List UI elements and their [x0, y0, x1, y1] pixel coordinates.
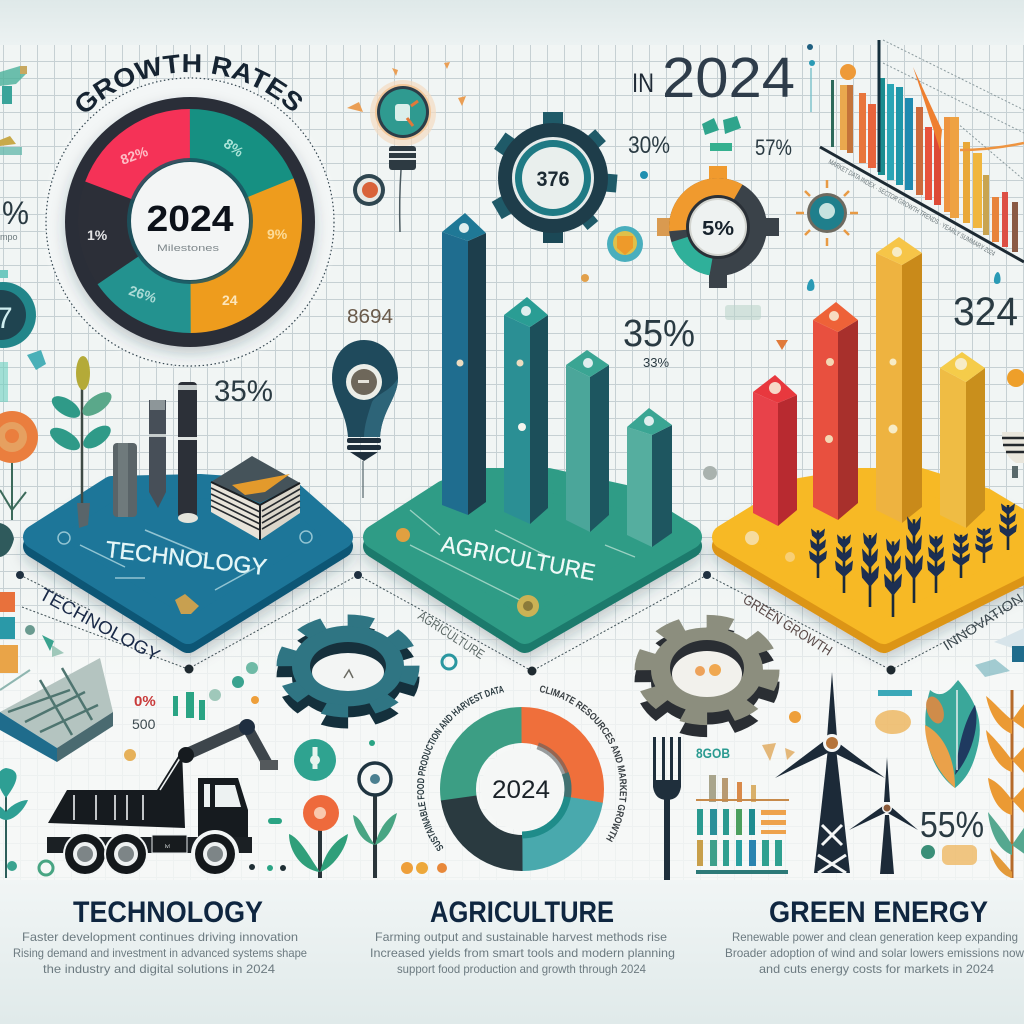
bar gold — [940, 352, 985, 528]
icon: colorful leaf — [875, 680, 980, 865]
small icons and scraps: technology: 500 — [132, 716, 156, 732]
left scraps: mpo — [0, 232, 18, 242]
small icons and scraps: technology — [124, 655, 456, 874]
percent labels: 8694 — [347, 306, 393, 328]
donut year: 2024 — [492, 776, 550, 804]
percent labels: 55% — [920, 804, 984, 845]
percent labels — [2, 132, 1018, 845]
percent labels: 35% — [623, 313, 695, 355]
description: Farming output and sustainable harvest methods rise — [375, 930, 667, 944]
bar red — [753, 375, 797, 526]
footer: technology — [13, 896, 307, 976]
footer: green energy — [725, 896, 1024, 976]
description: Faster development continues driving innovation — [22, 930, 298, 944]
bar yellow — [876, 237, 922, 523]
panel label: TECHNOLOGY — [104, 536, 268, 580]
icon: dump truck with crane — [47, 719, 278, 878]
segment labels: 9% — [267, 226, 288, 242]
year heading: in 2024: IN — [632, 68, 654, 98]
side label: green energy left: GREEN GROWTH — [740, 591, 835, 659]
icon: large wind turbine — [775, 672, 885, 873]
panel label: AGRICULTURE — [439, 531, 597, 585]
segment labels — [87, 135, 288, 308]
left scraps — [0, 66, 46, 402]
footer: agriculture — [370, 896, 675, 976]
connectors with nodes — [16, 571, 1024, 676]
panel: technology platform — [35, 486, 341, 641]
panel icons — [745, 531, 795, 562]
heading: TECHNOLOGY — [73, 896, 263, 929]
segment labels: 8% — [221, 135, 247, 160]
panel icons — [58, 530, 312, 590]
donut chart: 2024 growth rates — [40, 72, 340, 372]
segment labels: 82% — [118, 143, 150, 168]
panel icons — [410, 510, 635, 600]
segment labels: 1% — [87, 227, 108, 243]
icon: orange flower — [289, 795, 348, 878]
icon: gear with 376 — [492, 112, 618, 243]
icon: large lightbulb — [332, 340, 398, 498]
bar 4 — [627, 408, 672, 547]
segment labels: 24 — [222, 292, 238, 308]
chart: small factory bars — [696, 711, 801, 874]
icon: teal gear — [285, 621, 411, 722]
description: Increased yields from smart tools and modern planning — [370, 946, 675, 960]
center caption: Milestones — [157, 243, 220, 253]
side label: green energy right: INNOVATION — [940, 590, 1024, 654]
bar 2 — [504, 297, 548, 524]
icon: orange wheat — [986, 690, 1024, 878]
description — [725, 930, 1024, 976]
icon: sun — [796, 180, 858, 246]
side label: technology: TECHNOLOGY — [36, 584, 163, 665]
icon: gear with percent: 5% — [702, 218, 734, 240]
icon: gray gear — [643, 621, 771, 731]
icon: teal badge — [294, 739, 336, 781]
description: Rising demand and investment in advanced systems shape — [13, 946, 307, 960]
description — [370, 930, 675, 976]
icon: small orange dial — [353, 174, 385, 206]
percent labels: 33% — [643, 355, 669, 370]
description: Broader adoption of wind and solar lowers emissions now — [725, 946, 1024, 960]
wheels — [63, 830, 239, 878]
bar 1 — [442, 213, 486, 515]
bar orange red — [813, 302, 858, 520]
percent labels: 30% — [628, 132, 670, 159]
icon: small wind turbine — [849, 757, 918, 874]
icon: crop seedlings — [809, 503, 1017, 617]
icon: gear with percent — [657, 166, 779, 288]
panel: agriculture platform — [375, 480, 690, 641]
heading: GREEN ENERGY — [769, 896, 988, 929]
icon: left mini panels — [0, 592, 64, 690]
ring text right: CLIMATE RESOURCES AND MARKET GROWTH — [540, 686, 627, 842]
icon: ring flower — [353, 763, 397, 878]
icon: bottom left plant — [0, 768, 53, 878]
description — [13, 930, 307, 976]
panel: green energy platform — [724, 480, 1024, 641]
description: Renewable power and clean generation keep expanding — [732, 930, 1018, 944]
icon: dump truck with crane: lvl — [165, 844, 170, 850]
ring text left: SUSTAINABLE FOOD PRODUCTION AND HARVEST DATA — [417, 686, 504, 851]
small scattered dots and scraps: upper middle — [581, 44, 1001, 480]
bar chart: green energy bars — [753, 237, 985, 528]
icon: chip box — [0, 658, 113, 762]
chart: top right declining bars — [820, 40, 1024, 262]
side label: agriculture: AGRICULTURE — [415, 608, 487, 662]
small icons and scraps: technology: 0% — [134, 693, 156, 710]
icon: plant left — [46, 356, 115, 528]
icon: right mini panel — [975, 628, 1024, 677]
percent labels: % — [2, 195, 29, 231]
icon: top lightbulb — [347, 62, 466, 232]
right side scraps — [1002, 369, 1024, 478]
icon: small badge under gear — [607, 226, 643, 262]
center year: 2024 — [146, 198, 234, 239]
heading: AGRICULTURE — [430, 896, 614, 929]
title: growth rates: GROWTH RATES — [76, 54, 302, 112]
icon: fork — [653, 737, 681, 880]
percent labels: 324 — [953, 290, 1018, 334]
donut chart: second 2024 chart — [417, 686, 627, 871]
segment labels: 26% — [127, 282, 159, 306]
percent labels: 35% — [214, 375, 273, 408]
chart: small factory bars: 8GOB — [696, 745, 730, 761]
icon: cylinders and machine — [113, 382, 300, 540]
bar 3 — [566, 350, 609, 532]
year heading: in 2024: 2024 — [662, 46, 795, 110]
icon: gear with 376: 376 — [536, 168, 570, 191]
description: and cuts energy costs for markets in 2024 — [759, 962, 994, 976]
percent labels: 57% — [755, 135, 792, 160]
description: the industry and digital solutions in 2024 — [43, 962, 275, 976]
bar chart: agriculture bars — [442, 213, 672, 547]
description: support food production and growth through 2024 — [397, 962, 646, 976]
icon: left dial and flower — [0, 282, 38, 557]
